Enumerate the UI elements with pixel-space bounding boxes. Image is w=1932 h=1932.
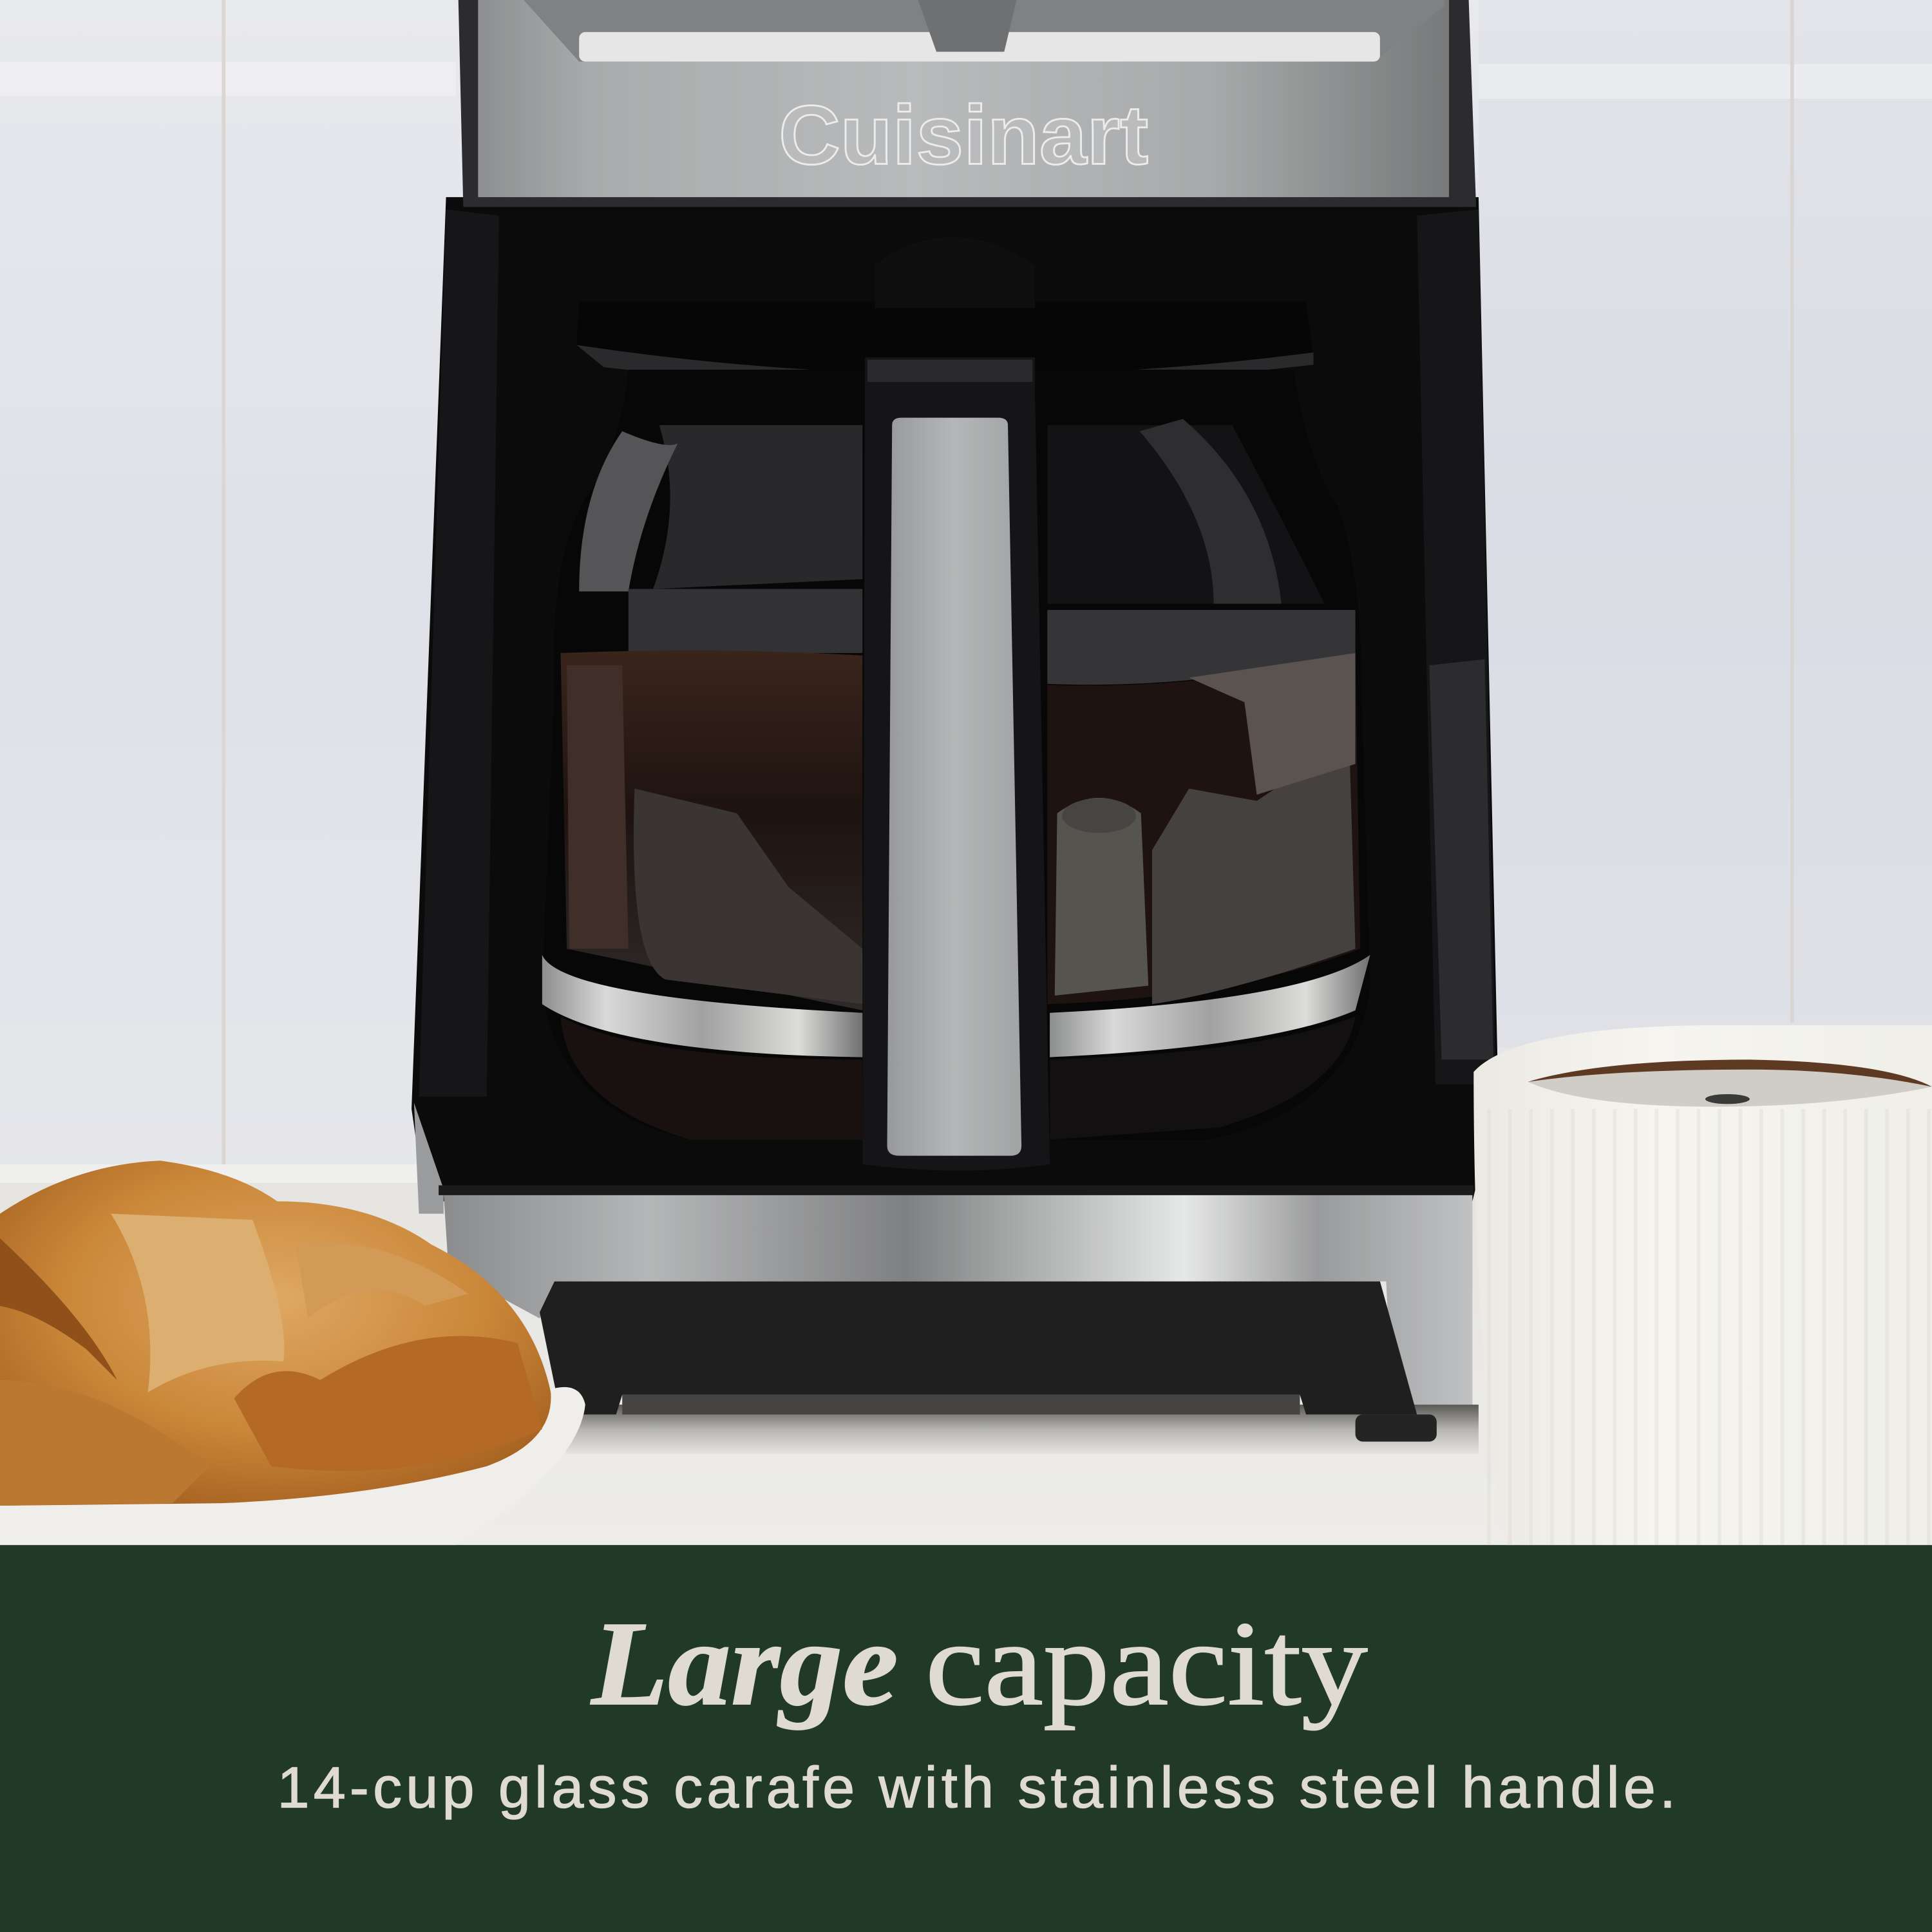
glass carafe bbox=[542, 370, 1370, 1140]
coffee bbox=[561, 650, 862, 1010]
green caption panel bbox=[0, 1545, 1932, 1932]
wall tiles background bbox=[0, 0, 1932, 1189]
coffee mug bbox=[1473, 1025, 1932, 1545]
carafe lid bbox=[576, 237, 1314, 386]
croissant bbox=[0, 1160, 551, 1506]
coffee maker bbox=[412, 0, 1499, 1454]
machine body bbox=[412, 197, 1499, 1201]
silver ring bbox=[542, 955, 862, 1057]
heading: capacity bbox=[925, 1596, 1368, 1730]
top stainless panel with logo bbox=[459, 0, 1476, 207]
stainless base bbox=[444, 1193, 1472, 1407]
plate bbox=[0, 1387, 585, 1545]
countertop bbox=[0, 1183, 1932, 1545]
counter shadow under machine bbox=[542, 1405, 1479, 1454]
stainless handle bbox=[862, 357, 1050, 1171]
subheading: 14-cup glass carafe with stainless steel handle. bbox=[277, 1756, 1676, 1821]
percolator post bbox=[1055, 798, 1148, 996]
lower base bbox=[561, 1016, 862, 1140]
underside foot bbox=[540, 1282, 1437, 1442]
logo: Cuisinart bbox=[779, 88, 1148, 182]
heading: Large bbox=[590, 1596, 898, 1730]
